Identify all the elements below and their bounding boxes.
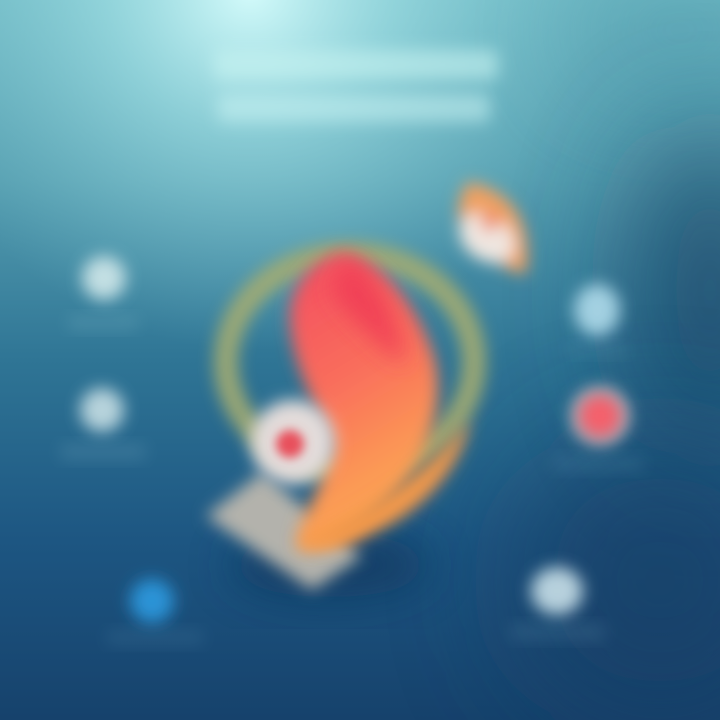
icon (80, 388, 124, 432)
left item 3 (106, 579, 204, 645)
label (68, 316, 138, 330)
icon: phone base (206, 472, 362, 590)
icon: small flame top right (450, 182, 527, 274)
icon: olive ring (226, 254, 474, 470)
title (214, 50, 498, 122)
central illustration (206, 252, 474, 590)
right item 2 (552, 386, 644, 471)
icon (570, 386, 630, 446)
right item 1 (566, 284, 628, 356)
icon: flame lower streak (298, 420, 470, 549)
icon: flame (290, 252, 438, 552)
right item 3 (510, 567, 606, 640)
icon (82, 256, 126, 300)
label (552, 456, 644, 471)
icon: white badge (251, 400, 335, 484)
icon (574, 284, 620, 336)
left item 1 (68, 256, 138, 330)
label (60, 444, 146, 460)
icon (531, 567, 583, 615)
label (566, 344, 628, 356)
label (510, 624, 606, 640)
left item 2 (60, 388, 146, 460)
label (106, 630, 204, 645)
central shadow (230, 533, 430, 597)
icon: flame red core (330, 258, 405, 365)
icon (130, 579, 174, 623)
